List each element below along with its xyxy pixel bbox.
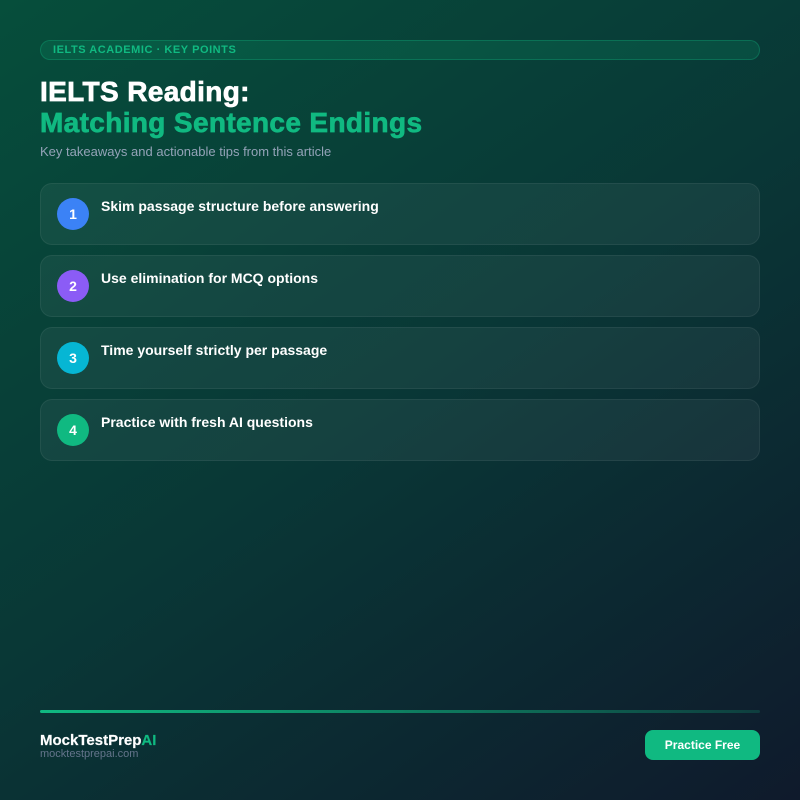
card: tip 4 [40, 399, 760, 461]
card: tip 3 [40, 327, 760, 389]
number 1: 1 [69, 206, 77, 222]
brand url: mocktestprepai.com [40, 748, 138, 760]
tip text 2: Use elimination for MCQ options [101, 270, 318, 286]
card: tip 2 [40, 255, 760, 317]
number 4: 4 [69, 422, 77, 438]
badge: IELTS ACADEMIC · KEY POINTS [53, 44, 236, 56]
footer rule [40, 710, 760, 713]
number 2: 2 [69, 278, 77, 294]
title: Matching Sentence Endings [40, 107, 422, 138]
button: practice free [645, 730, 760, 760]
badge [40, 40, 760, 60]
title [40, 76, 422, 138]
title: IELTS Reading: [40, 76, 250, 107]
number 1 [57, 198, 89, 230]
number 2 [57, 270, 89, 302]
button: practice free: Practice Free [665, 738, 740, 752]
subtitle: Key takeaways and actionable tips from this article [40, 144, 331, 159]
number 3: 3 [69, 350, 77, 366]
number 4 [57, 414, 89, 446]
card: tip 1 [40, 183, 760, 245]
brand [40, 732, 156, 760]
brand name: MockTestPrepAI [40, 732, 156, 749]
tip text 3: Time yourself strictly per passage [101, 342, 327, 358]
number 3 [57, 342, 89, 374]
tip text 1: Skim passage structure before answering [101, 198, 379, 214]
tip text 4: Practice with fresh AI questions [101, 414, 313, 430]
